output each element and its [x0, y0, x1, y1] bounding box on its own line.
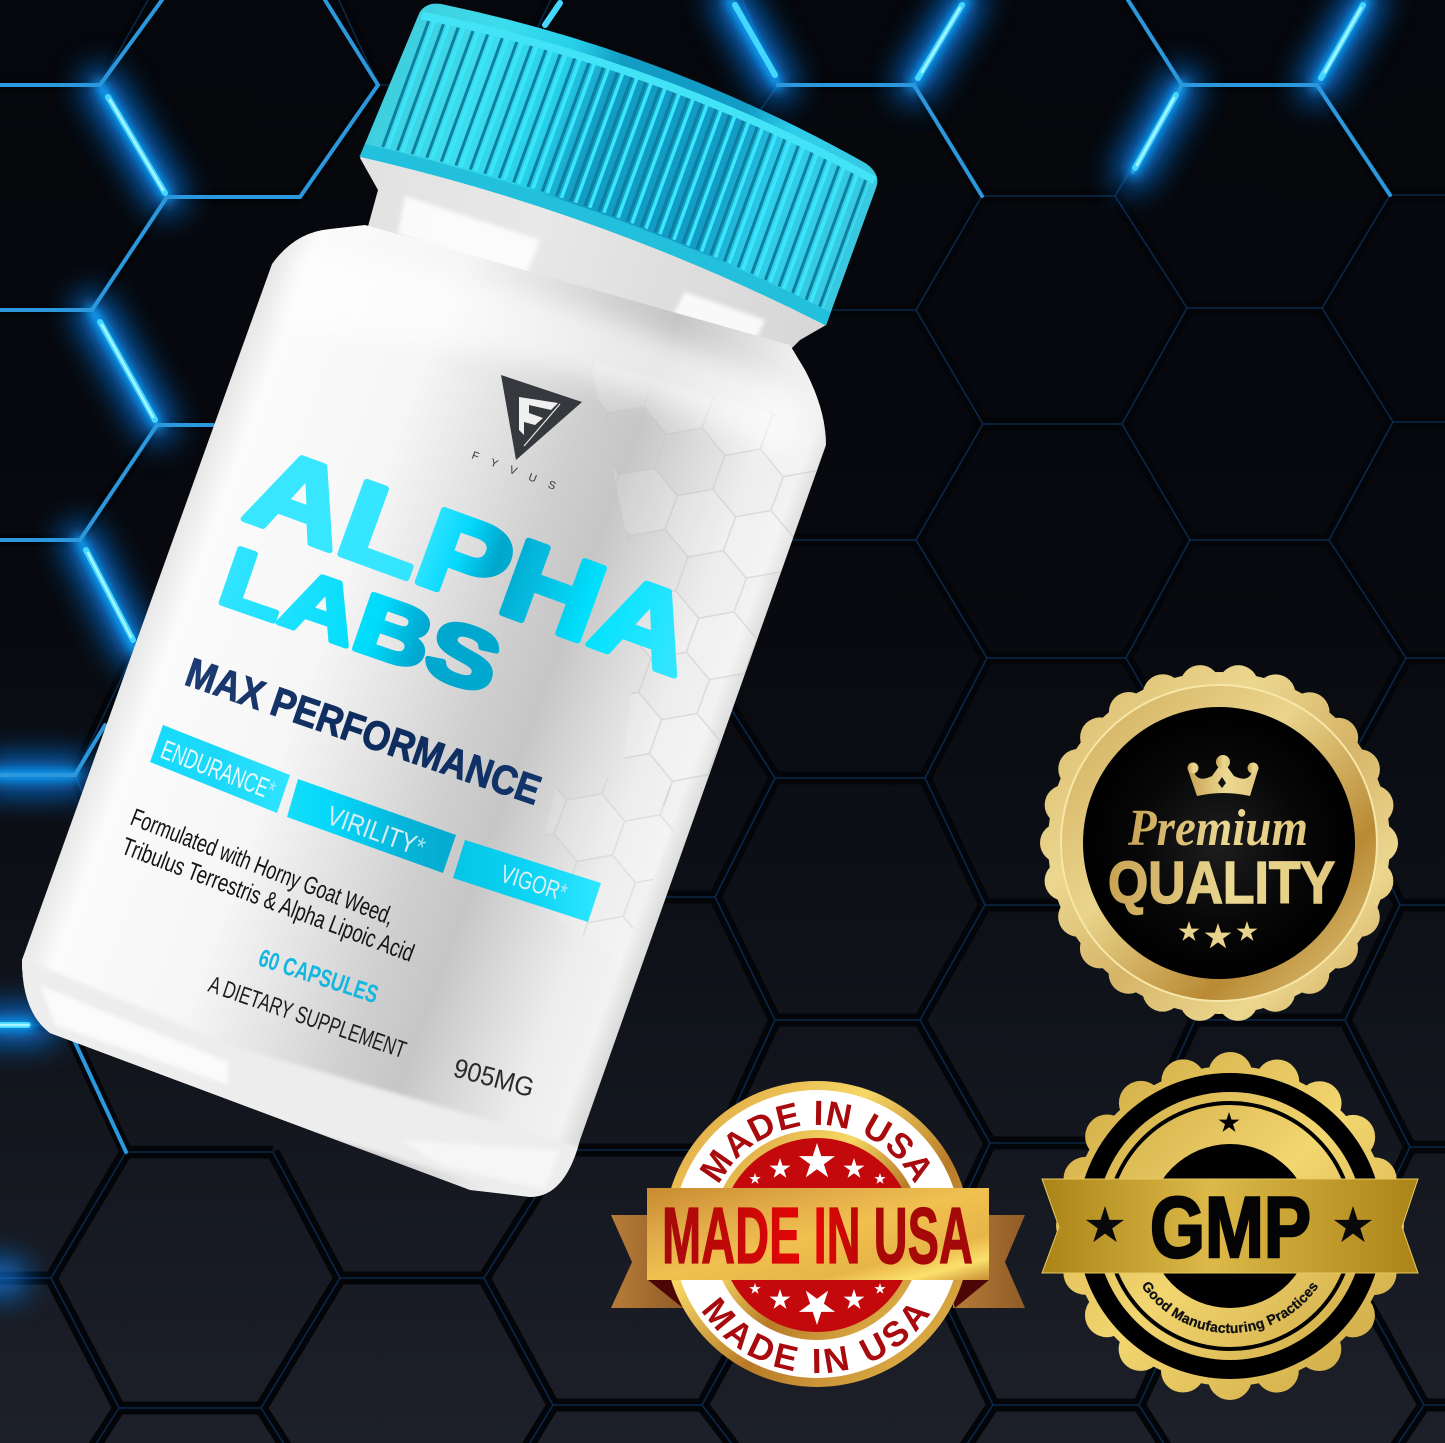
- ribbon: [1042, 1179, 1418, 1273]
- badge: Premium Quality: [1048, 672, 1390, 1014]
- tag: Virility: VIRILITY*: [323, 800, 430, 863]
- tag: Endurance: ENDURANCE*: [157, 735, 280, 806]
- badge: Made in USA: [611, 1081, 1025, 1387]
- tag: Vigor: VIGOR*: [497, 860, 571, 907]
- heading: Quality: QUALITY: [1108, 850, 1335, 916]
- product bottle: [0, 0, 890, 1210]
- icon: ribbon stars: [1086, 1206, 1372, 1242]
- tagline: Max Performance: MAX PERFORMANCE: [180, 649, 547, 814]
- tag: Vigor: [453, 840, 601, 922]
- ribbon text: GMP: GMP: [1150, 1180, 1311, 1276]
- ribbon front: [647, 1188, 989, 1280]
- capsule count: 60 CAPSULES: [255, 944, 382, 1009]
- icon: three stars: [1179, 921, 1257, 948]
- bottle neck: [360, 120, 842, 352]
- brand logo: Fyvus: FYVUS: [470, 450, 557, 493]
- brand logo: Fyvus: [470, 375, 582, 493]
- icon: top star: [1219, 1112, 1239, 1132]
- ingredient description: Tribulus Terrestris & Alpha Lipoic Acid: [118, 832, 418, 968]
- curved text: Good Manufacturing Practices: Good Manufacturing Practices: [1143, 1282, 1318, 1334]
- curved text: bottom: MADE IN USA: [702, 1296, 930, 1374]
- product name: ALPHA: ALPHA: [233, 423, 712, 699]
- ingredient description: Formulated with Horny Goat Weed,: [127, 803, 398, 931]
- product name: LABS: LABS: [209, 529, 512, 712]
- bottle body: [22, 225, 826, 1197]
- icon: crown: [1188, 755, 1258, 796]
- icon: white stars: [749, 1143, 886, 1325]
- badge: GMP: [1041, 1052, 1419, 1400]
- ribbon text: MADE IN USA: [662, 1191, 973, 1280]
- curved text: top: MADE IN USA: [699, 1100, 930, 1184]
- tag: Virility: [287, 779, 456, 873]
- dosage: 905MG: [450, 1053, 537, 1103]
- heading: Premium: Premium: [1127, 800, 1308, 857]
- ribbon tails: [611, 1215, 1025, 1308]
- tag: Endurance: [150, 725, 290, 813]
- body shading: [0, 250, 830, 1210]
- bottle cap: [360, 0, 890, 326]
- dietary supplement line: A DIETARY SUPPLEMENT: [205, 971, 410, 1064]
